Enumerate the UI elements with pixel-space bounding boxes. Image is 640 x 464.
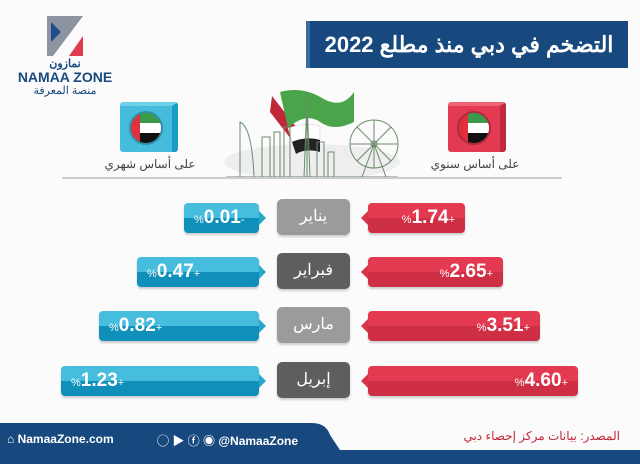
month label xyxy=(277,362,350,398)
label: yearly: على أساس سنوي xyxy=(431,157,519,171)
icon: red cube yearly xyxy=(448,102,506,152)
monthly bar xyxy=(137,257,259,287)
monthly bar xyxy=(99,311,259,341)
yearly bar xyxy=(368,311,540,341)
yearly bar: %4.60+ xyxy=(515,370,568,391)
website: ⌂ NamaaZone.com xyxy=(7,432,114,446)
footer xyxy=(0,423,640,464)
icon: blue cube monthly xyxy=(120,102,178,152)
row: March xyxy=(98,307,541,346)
yearly bar xyxy=(368,366,578,396)
monthly bar xyxy=(61,366,259,396)
monthly bar: %1.23+ xyxy=(71,370,124,391)
month label: مارس xyxy=(293,316,334,333)
month label xyxy=(277,199,350,235)
yearly bar: %1.74+ xyxy=(402,207,455,228)
yearly bar xyxy=(368,203,465,233)
logo: نمازون xyxy=(49,58,81,70)
label: monthly: على أساس شهري xyxy=(104,157,196,171)
monthly bar: %0.47+ xyxy=(147,261,200,282)
logo xyxy=(18,16,112,97)
month label: فبراير xyxy=(294,262,333,279)
row: January xyxy=(183,199,466,238)
divider xyxy=(62,177,562,179)
source: المصدر: بيانات مركز إحصاء دبي xyxy=(463,429,620,443)
social icons and handle: ◯ ▶ ⓕ ◉ @NamaaZone xyxy=(157,434,298,448)
month label: يناير xyxy=(300,208,327,225)
skyline illustration xyxy=(224,90,400,177)
icon: logo mark xyxy=(47,16,83,56)
logo: NAMAA ZONE xyxy=(18,69,112,85)
title xyxy=(306,21,628,68)
title: التضخم في دبي منذ مطلع 2022 xyxy=(325,32,613,57)
yearly bar: %3.51+ xyxy=(477,315,530,336)
month label: إبريل xyxy=(296,371,331,388)
row: April xyxy=(60,362,579,401)
logo: منصة المعرفة xyxy=(33,85,96,97)
yearly bar: %2.65+ xyxy=(440,261,493,282)
month label xyxy=(277,253,350,289)
monthly bar: %0.82+ xyxy=(109,315,162,336)
monthly bar xyxy=(184,203,259,233)
month label xyxy=(277,307,350,343)
yearly bar xyxy=(368,257,503,287)
monthly bar: %0.01- xyxy=(194,207,244,228)
row: February xyxy=(136,253,504,292)
